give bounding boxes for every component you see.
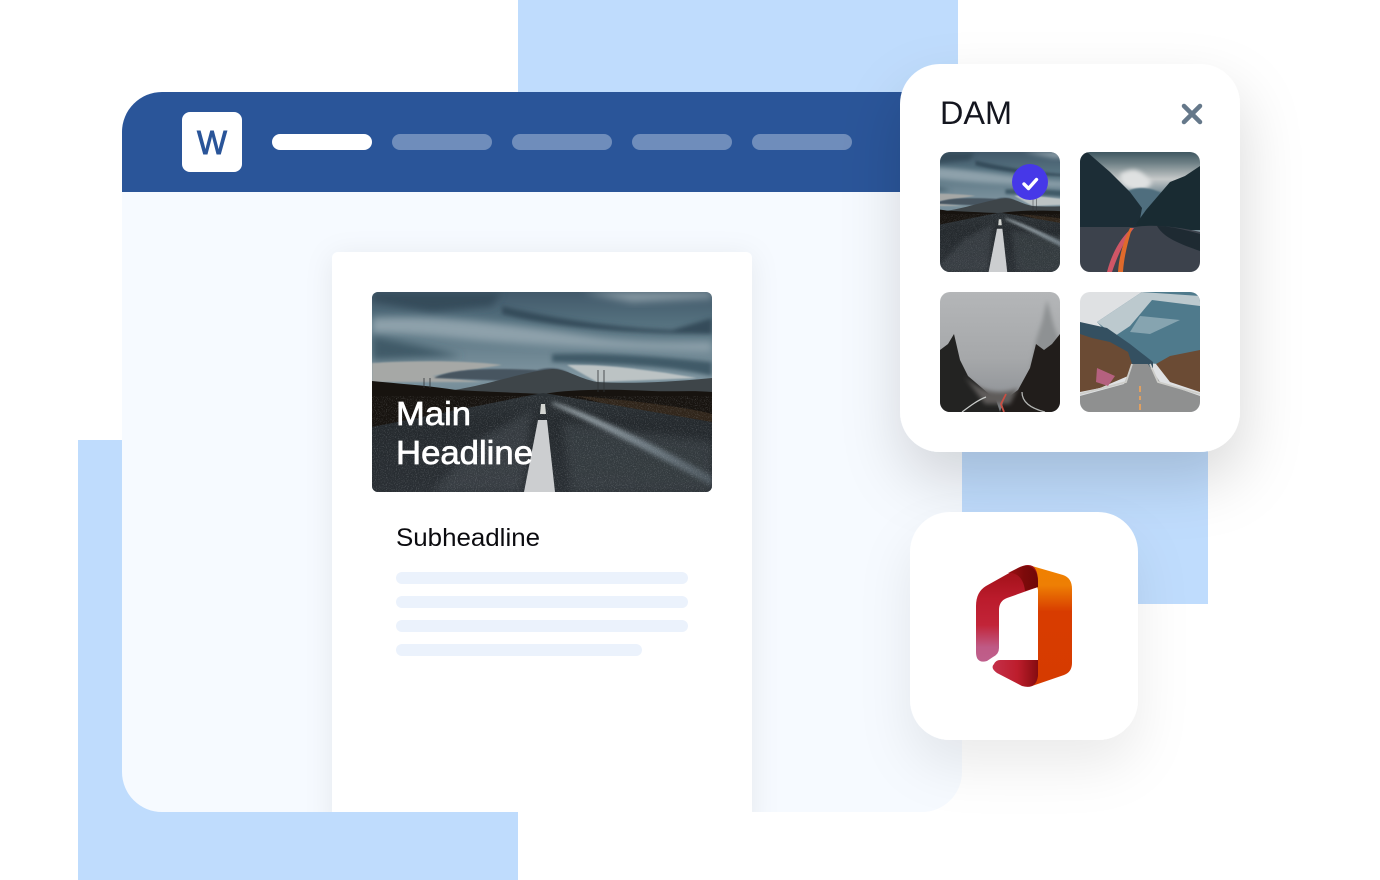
main headline: Main (396, 395, 471, 432)
icon: word logo (182, 112, 242, 172)
DAM heading: DAM (940, 95, 1012, 131)
hero image: road (372, 292, 712, 492)
icon: close (1184, 106, 1200, 122)
word application window (122, 92, 962, 830)
icon: office logo (976, 565, 1072, 687)
background block: bottom left (78, 440, 518, 880)
icon: word logo: W (197, 124, 228, 161)
thumbnail: foggy forest road (940, 292, 1060, 412)
icon: selected check badge (1012, 164, 1048, 200)
navigation tabs (272, 134, 852, 150)
window header bar (122, 92, 962, 192)
panel: DAM image picker (897, 64, 1240, 452)
subheadline: Subheadline (396, 524, 540, 552)
main headline: Headline (396, 434, 533, 471)
body text placeholder lines (396, 572, 688, 656)
background block: top (518, 0, 958, 120)
card: office app (910, 512, 1138, 740)
thumbnail: forest road with red lines (1080, 152, 1200, 272)
background block: right (962, 440, 1208, 604)
thumbnail: mountain road (1080, 292, 1200, 412)
document page (332, 252, 752, 830)
thumbnail: selected road (940, 152, 1060, 272)
